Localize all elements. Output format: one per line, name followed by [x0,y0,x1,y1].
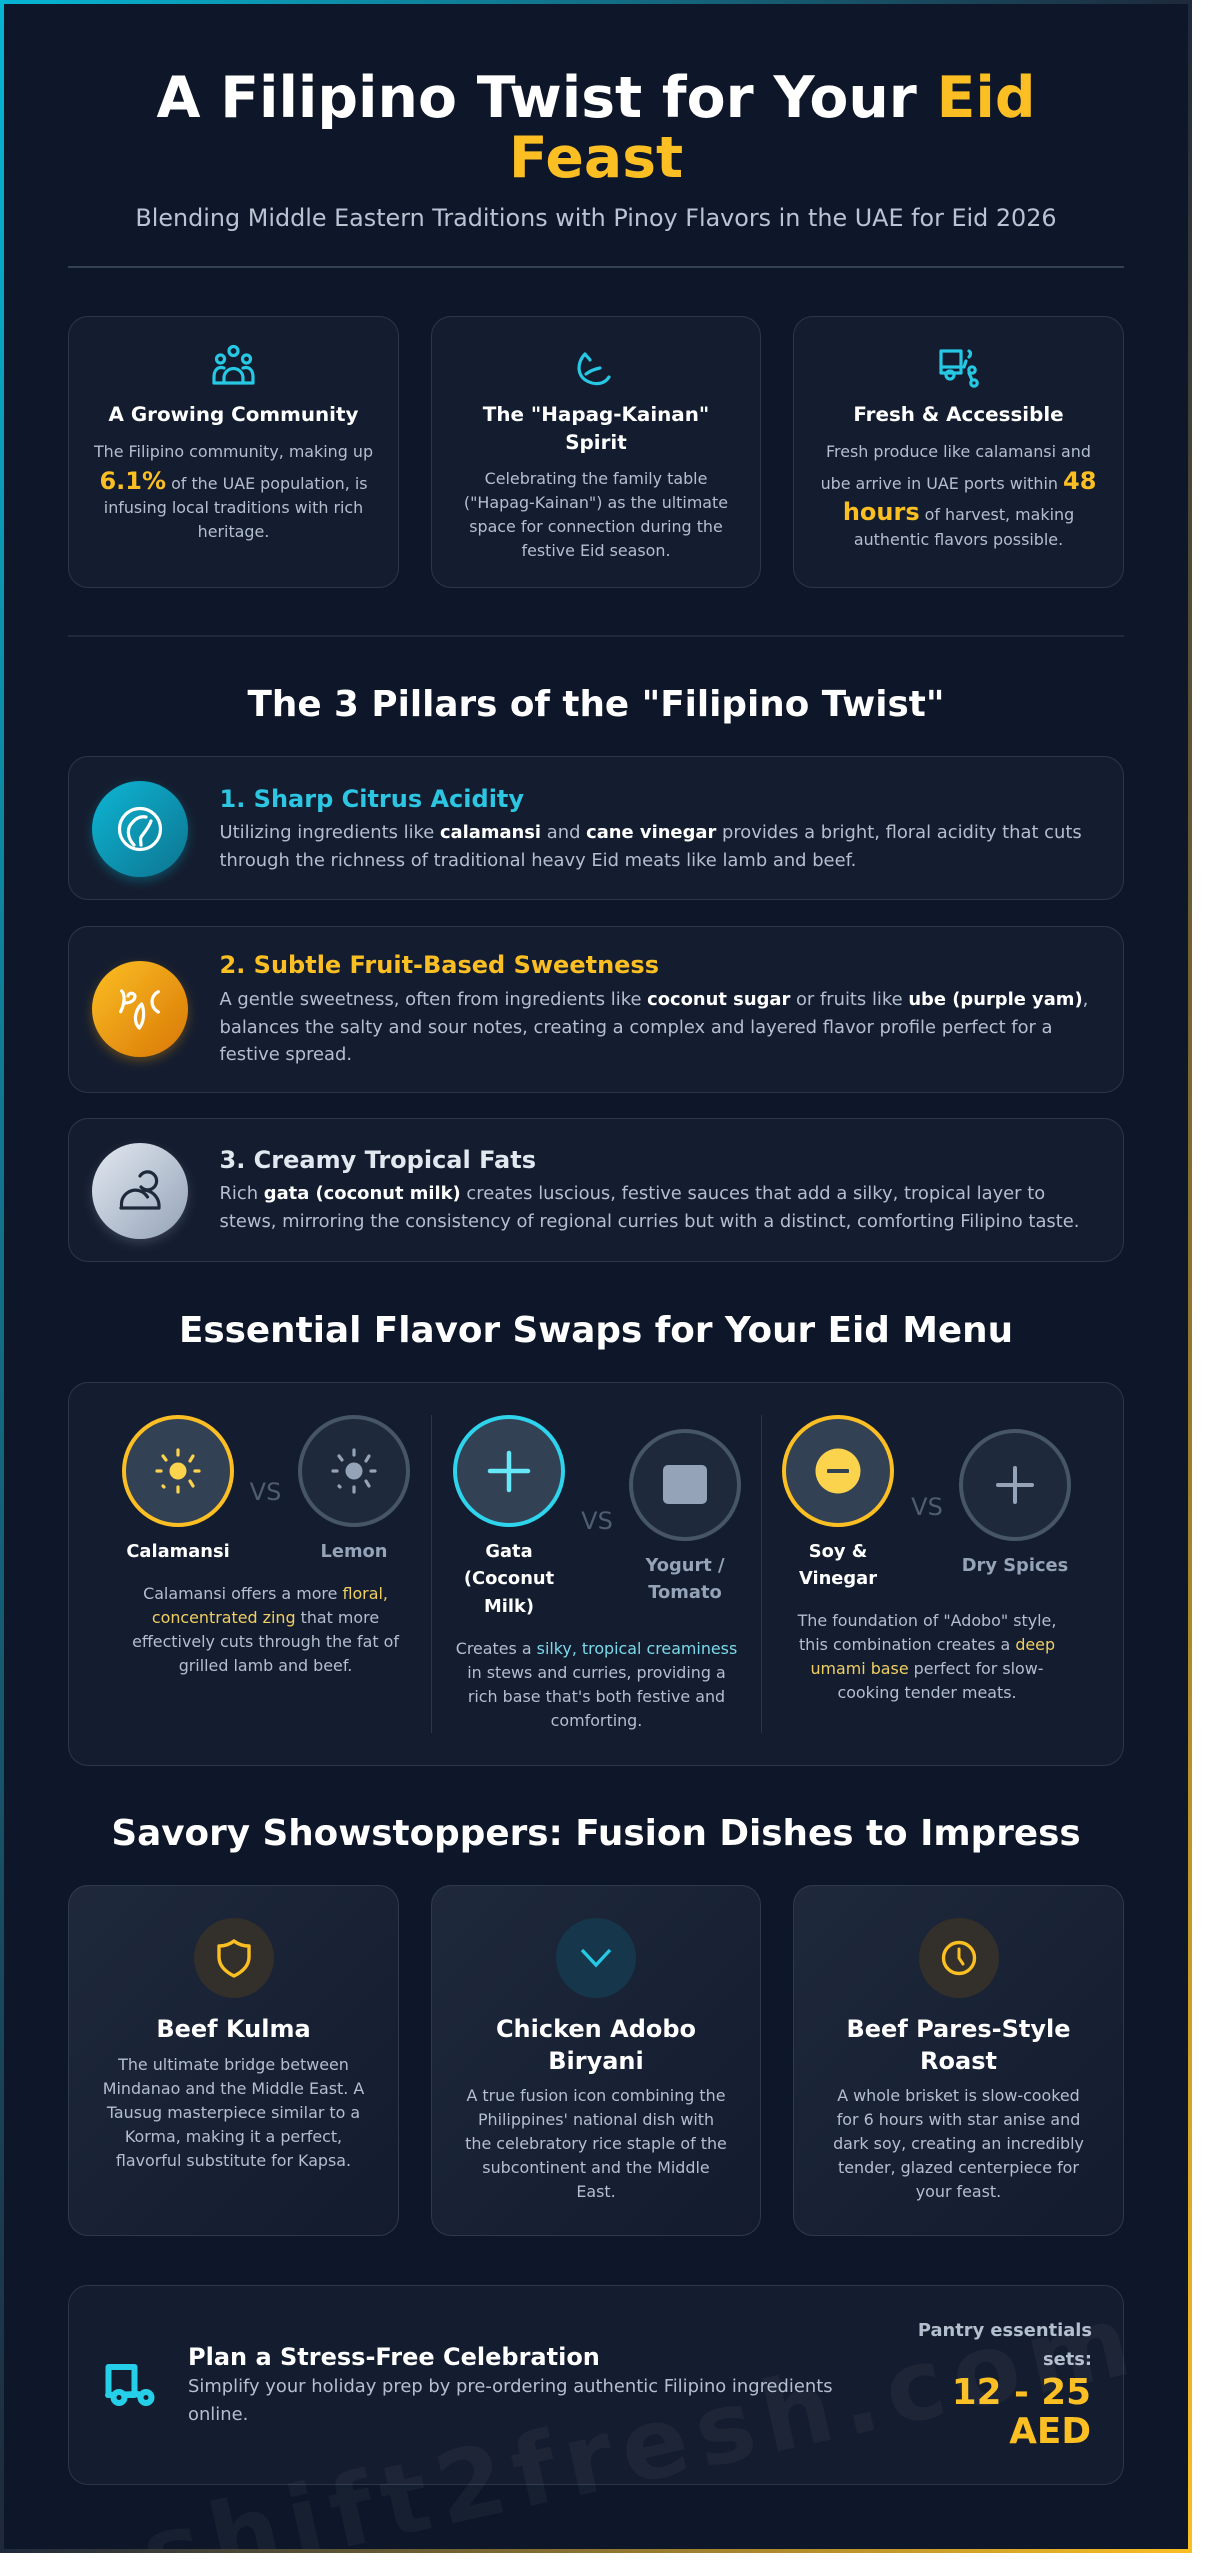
panel: chicken adobo biryani [431,1885,761,2236]
body text: through the richness of traditional heavy Eid meats like lamb and beef. [220,850,856,870]
body text: festive Eid season. [521,541,671,560]
body text: online. [188,2404,248,2425]
icon: yogurt square [629,1429,741,1541]
heading: A Growing Community [109,403,358,426]
label: yogurt tomato: Tomato [648,1582,722,1603]
pantry label [918,2320,1092,2370]
price [952,2373,1091,2451]
description [132,1584,400,1674]
body text: for 6 hours with star anise and [837,2110,1080,2129]
heading: Biryani [548,2046,644,2074]
body text: dark soy, creating an incredibly [833,2134,1084,2153]
title [156,65,1036,191]
description: grilled lamb and beef. [179,1656,352,1674]
panel: fresh and accessible [793,316,1124,588]
body text: infusing local traditions with rich [104,498,363,517]
panel: hapag-kainan spirit [431,316,761,588]
label: gata: Milk) [484,1596,534,1616]
swap: calamansi vs lemon [122,1415,410,1674]
icon: delivery truck [105,2364,154,2406]
title: Feast [509,125,683,191]
body text: flavorful substitute for Kapsa. [116,2150,351,2170]
body text: Simplify your holiday prep by pre-ordering authentic Filipino ingredients [188,2376,833,2397]
body text: ("Hapag-Kainan") as the ultimate [464,493,728,512]
description [456,1638,737,1730]
heading: flavor swaps: Essential Flavor Swaps for Your Eid Menu [179,1310,1013,1351]
price: AED [1009,2411,1091,2452]
body text: the celebratory rice staple of the [465,2134,727,2153]
price: 12 - 25 [952,2372,1091,2413]
body text [94,442,373,541]
heading: Beef Pares-Style [846,2014,1071,2042]
description: Calamansi offers a more floral, [143,1584,388,1602]
body text: East. [576,2182,616,2201]
body text: hours of harvest, making [843,498,1074,526]
panel: a growing community [68,316,399,588]
body text [833,2086,1084,2201]
pantry label: Pantry essentials [918,2320,1092,2341]
body text [464,469,728,560]
vs: VS [911,1493,943,1521]
label: yogurt tomato: Yogurt / [645,1554,725,1576]
body text: tender, glazed centerpiece for [838,2158,1079,2177]
description: effectively cuts through the fat of [132,1632,399,1650]
icon: calamansi sun [122,1415,234,1527]
description: rich base that's both festive and [468,1686,725,1706]
body text: festive spread. [220,1044,352,1065]
pantry label: sets: [1043,2348,1092,2370]
body text: Utilizing ingredients like calamansi and cane vinegar provides a bright, floral acidity that cuts [220,822,1082,843]
body text: space for connection during the [469,517,723,536]
body text: Fresh produce like calamansi and [826,442,1091,461]
body text: stews, mirroring the consistency of regional curries but with a distinct, comforting Filipino taste. [220,1210,1079,1232]
body text: authentic flavors possible. [854,530,1063,548]
heading: Beef Kulma [156,2014,311,2042]
heading: Chicken Adobo [496,2014,696,2042]
body text: The Filipino community, making up [94,442,373,461]
description: in stews and curries, providing a [467,1662,726,1682]
heading: 1. Sharp Citrus Acidity [220,784,524,812]
icon: chevron [556,1918,636,1998]
title: A Filipino Twist for Your Eid [156,65,1036,131]
icon: gata plus [453,1415,565,1527]
body text: ube arrive in UAE ports within 48 [821,467,1096,495]
icon: fruit [86,960,194,1066]
body text: A true fusion icon combining the [466,2086,726,2105]
panel: pillar 3 [68,1118,1124,1262]
panel: flavor swaps [68,1382,1124,1766]
label: soy vinegar: Soy & [809,1540,867,1562]
label: calamansi: Calamansi [126,1540,230,1562]
swap: gata vs yogurt [453,1415,741,1730]
panel: beef kulma [68,1885,399,2236]
body text [220,822,1082,870]
body text: heritage. [198,522,269,541]
heading: The "Hapag-Kainan" [483,403,709,426]
icon: dry spices plus [959,1429,1071,1541]
body text [821,442,1096,548]
icon: drop [577,352,611,386]
body text: A whole brisket is slow-cooked [837,2086,1080,2105]
label: lemon: Lemon [320,1540,388,1562]
heading: Spirit [565,430,627,454]
body text [220,989,1088,1065]
heading [846,2014,1071,2074]
body text: Mindanao and the Middle East. A [103,2078,364,2098]
body text [103,2054,364,2170]
description: this combination creates a deep [799,1634,1055,1654]
icon: lemon [298,1415,410,1527]
icon: soy minus [782,1415,894,1527]
icon: truck [939,349,979,388]
body text [188,2376,833,2425]
description: Creates a silky, tropical creaminess [456,1638,737,1658]
description [798,1610,1056,1702]
body text: balances the salty and sour notes, creating a complex and layered flavor profile perfect for a [220,1016,1053,1038]
body text: Philippines' national dish with [478,2110,714,2129]
body text: Tausug masterpiece similar to a [107,2102,360,2122]
label: gata: Gata [485,1540,533,1562]
body text: The ultimate bridge between [118,2054,349,2074]
body text: Celebrating the family table [485,469,707,488]
heading: Plan a Stress-Free Celebration [188,2343,600,2371]
heading: Roast [920,2046,997,2074]
body text [220,1183,1079,1232]
body text: your feast. [916,2182,1001,2201]
panel: pillar 2 [68,926,1124,1093]
body text [465,2086,727,2201]
body text: Rich gata (coconut milk) creates luscious, festive sauces that add a silky, tropical layer to [220,1183,1045,1204]
heading: savory showstoppers: Savory Showstoppers: Fusion Dishes to Impress [111,1812,1081,1854]
description: The foundation of "Adobo" style, [798,1610,1056,1630]
heading: 2. Subtle Fruit-Based Sweetness [220,951,659,979]
description: concentrated zing that more [152,1608,379,1626]
panel: beef pares roast [793,1885,1124,2236]
description: comforting. [551,1710,642,1730]
description: umami base perfect for slow- [810,1658,1044,1678]
body text: A gentle sweetness, often from ingredients like coconut sugar or fruits like ube (purple yam), [220,989,1088,1010]
label: gata: (Coconut [464,1568,554,1589]
swap: soy vinegar vs dry spices [782,1415,1071,1702]
label: dry spices: Dry Spices [962,1554,1068,1576]
heading: 3. Creamy Tropical Fats [220,1146,536,1174]
heading: three pillars: The 3 Pillars of the "Filipino Twist" [248,684,944,724]
body text: Korma, making it a perfect, [125,2126,342,2146]
vs: VS [250,1478,281,1506]
label: yogurt tomato [645,1554,725,1603]
icon: shield [194,1918,274,1998]
heading: Fresh & Accessible [853,403,1064,426]
icon: citrus [88,780,192,886]
panel: pillar 1 [68,756,1124,900]
body text: subcontinent and the Middle [482,2158,710,2177]
subtitle: Blending Middle Eastern Traditions with Pinoy Flavors in the UAE for Eid 2026 [135,204,1057,232]
body text: 6.1% of the UAE population, is [99,467,368,495]
description: cooking tender meats. [837,1682,1017,1702]
vs: VS [581,1507,613,1535]
icon: coconut milk [89,1143,191,1246]
panel: call to action [68,2285,1124,2485]
heading [482,403,709,454]
icon: community [212,344,255,385]
label: soy vinegar [799,1540,877,1589]
icon: clock [919,1918,999,1998]
heading [496,2014,696,2074]
label: soy vinegar: Vinegar [799,1568,877,1589]
label: gata [464,1540,554,1616]
